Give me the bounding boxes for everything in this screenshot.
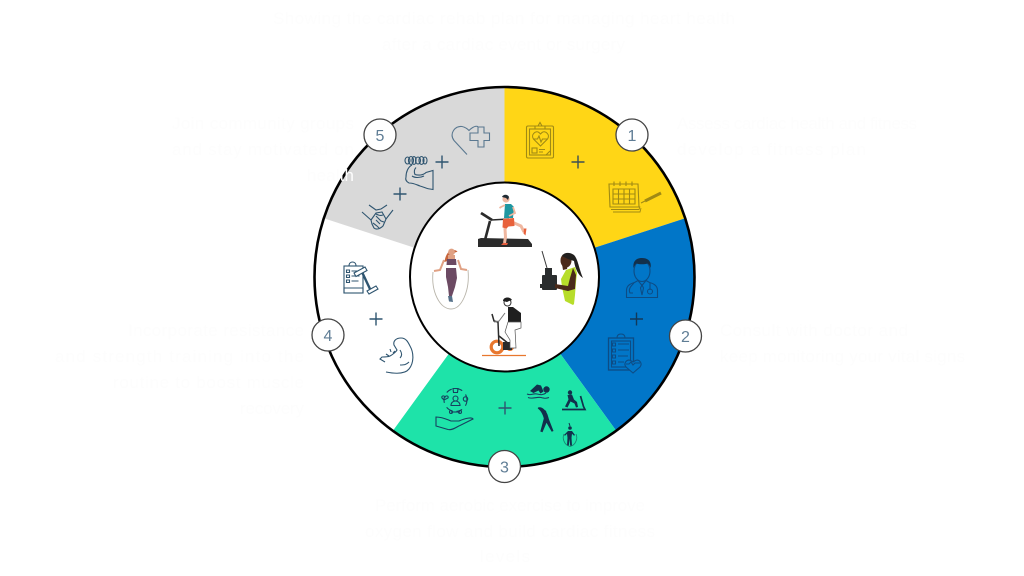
figure: treadmill runner (478, 195, 532, 247)
plus: green (498, 402, 512, 414)
number badge 4 (312, 319, 344, 351)
figure: woman holding weight (540, 251, 583, 305)
number badge 1: 1 (628, 128, 637, 145)
icon: doctor (626, 258, 658, 298)
icon: stretching figure (538, 407, 554, 432)
text block: step 5 (172, 114, 354, 185)
text block: step 4: routine to boost muscle (113, 373, 304, 392)
plus: grey upper (436, 156, 448, 168)
number badge 3 (488, 450, 520, 482)
number badge 3: 3 (500, 460, 509, 476)
icon: clipboard with heart (608, 334, 641, 373)
text block: step 1: Assess cardiac health and fitness (677, 114, 917, 133)
text block: step 2 (720, 321, 965, 366)
text block: step 4: and strength training into the (55, 347, 304, 366)
text block: step 2: keep monitoring your vital signs (720, 347, 965, 366)
text block: step 3: oxygen flow and build cardiac fitness (365, 522, 655, 541)
icon: clipboard with dumbbell (344, 262, 378, 294)
plus: grey lower (394, 188, 406, 200)
plus: white segment (370, 312, 382, 326)
segment 4: white (315, 218, 504, 431)
segment 1: yellow (504, 87, 685, 277)
plus: blue (630, 312, 643, 326)
title (273, 9, 735, 54)
figure: jump rope woman (433, 249, 468, 309)
outer ring (314, 87, 694, 467)
text block: step 2: Consult with doctor and (720, 321, 908, 340)
text block: step 1: develop a fitness plan (677, 140, 866, 159)
plus: yellow (572, 156, 584, 168)
text block: step 3 (365, 496, 655, 566)
text block: step 4 (55, 321, 304, 418)
wheel diagram (314, 87, 694, 467)
text block: step 1 (677, 114, 917, 159)
text block: step 3: Perform aerobic exercise to improve (375, 496, 645, 515)
number badge 5: 5 (376, 128, 385, 145)
segment 2: blue (504, 218, 694, 431)
number badge 1 (616, 119, 648, 151)
icon: calendar and pencil (609, 182, 661, 212)
number badge 2: 2 (681, 329, 690, 346)
segment 3: green (393, 277, 616, 467)
title: after a cardiac event or surgery (382, 35, 626, 54)
icon: flexed arm (380, 338, 413, 373)
icon: heart clipboard (526, 122, 554, 158)
number badge 4: 4 (324, 328, 333, 345)
text block: step 4: recovery (240, 399, 304, 418)
icon: heart with plus (452, 126, 490, 154)
icon: community care hand (436, 388, 473, 430)
text block: step 5: health (307, 166, 354, 185)
number badge 2 (670, 320, 702, 352)
icon: rope jumper (563, 423, 577, 446)
text block: step 5: Join community groups (172, 114, 354, 133)
segment 5: grey (324, 87, 504, 277)
figure: cyclist (482, 297, 526, 356)
icon: swimmer (527, 384, 550, 398)
icon: treadmill runner (562, 390, 585, 410)
centre circle (410, 182, 599, 372)
text block: step 4: Incorporate resistance (128, 321, 304, 340)
treadmill (478, 238, 532, 247)
icon: handshake (362, 205, 393, 229)
text block: step 3: levels (480, 547, 530, 566)
number badge 5 (364, 119, 396, 151)
runner (504, 220, 508, 243)
text block: step 5: and stay motivated on (172, 140, 354, 159)
title: Showing the cardiac rehab plan for managing heart health (273, 9, 735, 28)
icon: arm lifting dumbbell (405, 156, 433, 190)
